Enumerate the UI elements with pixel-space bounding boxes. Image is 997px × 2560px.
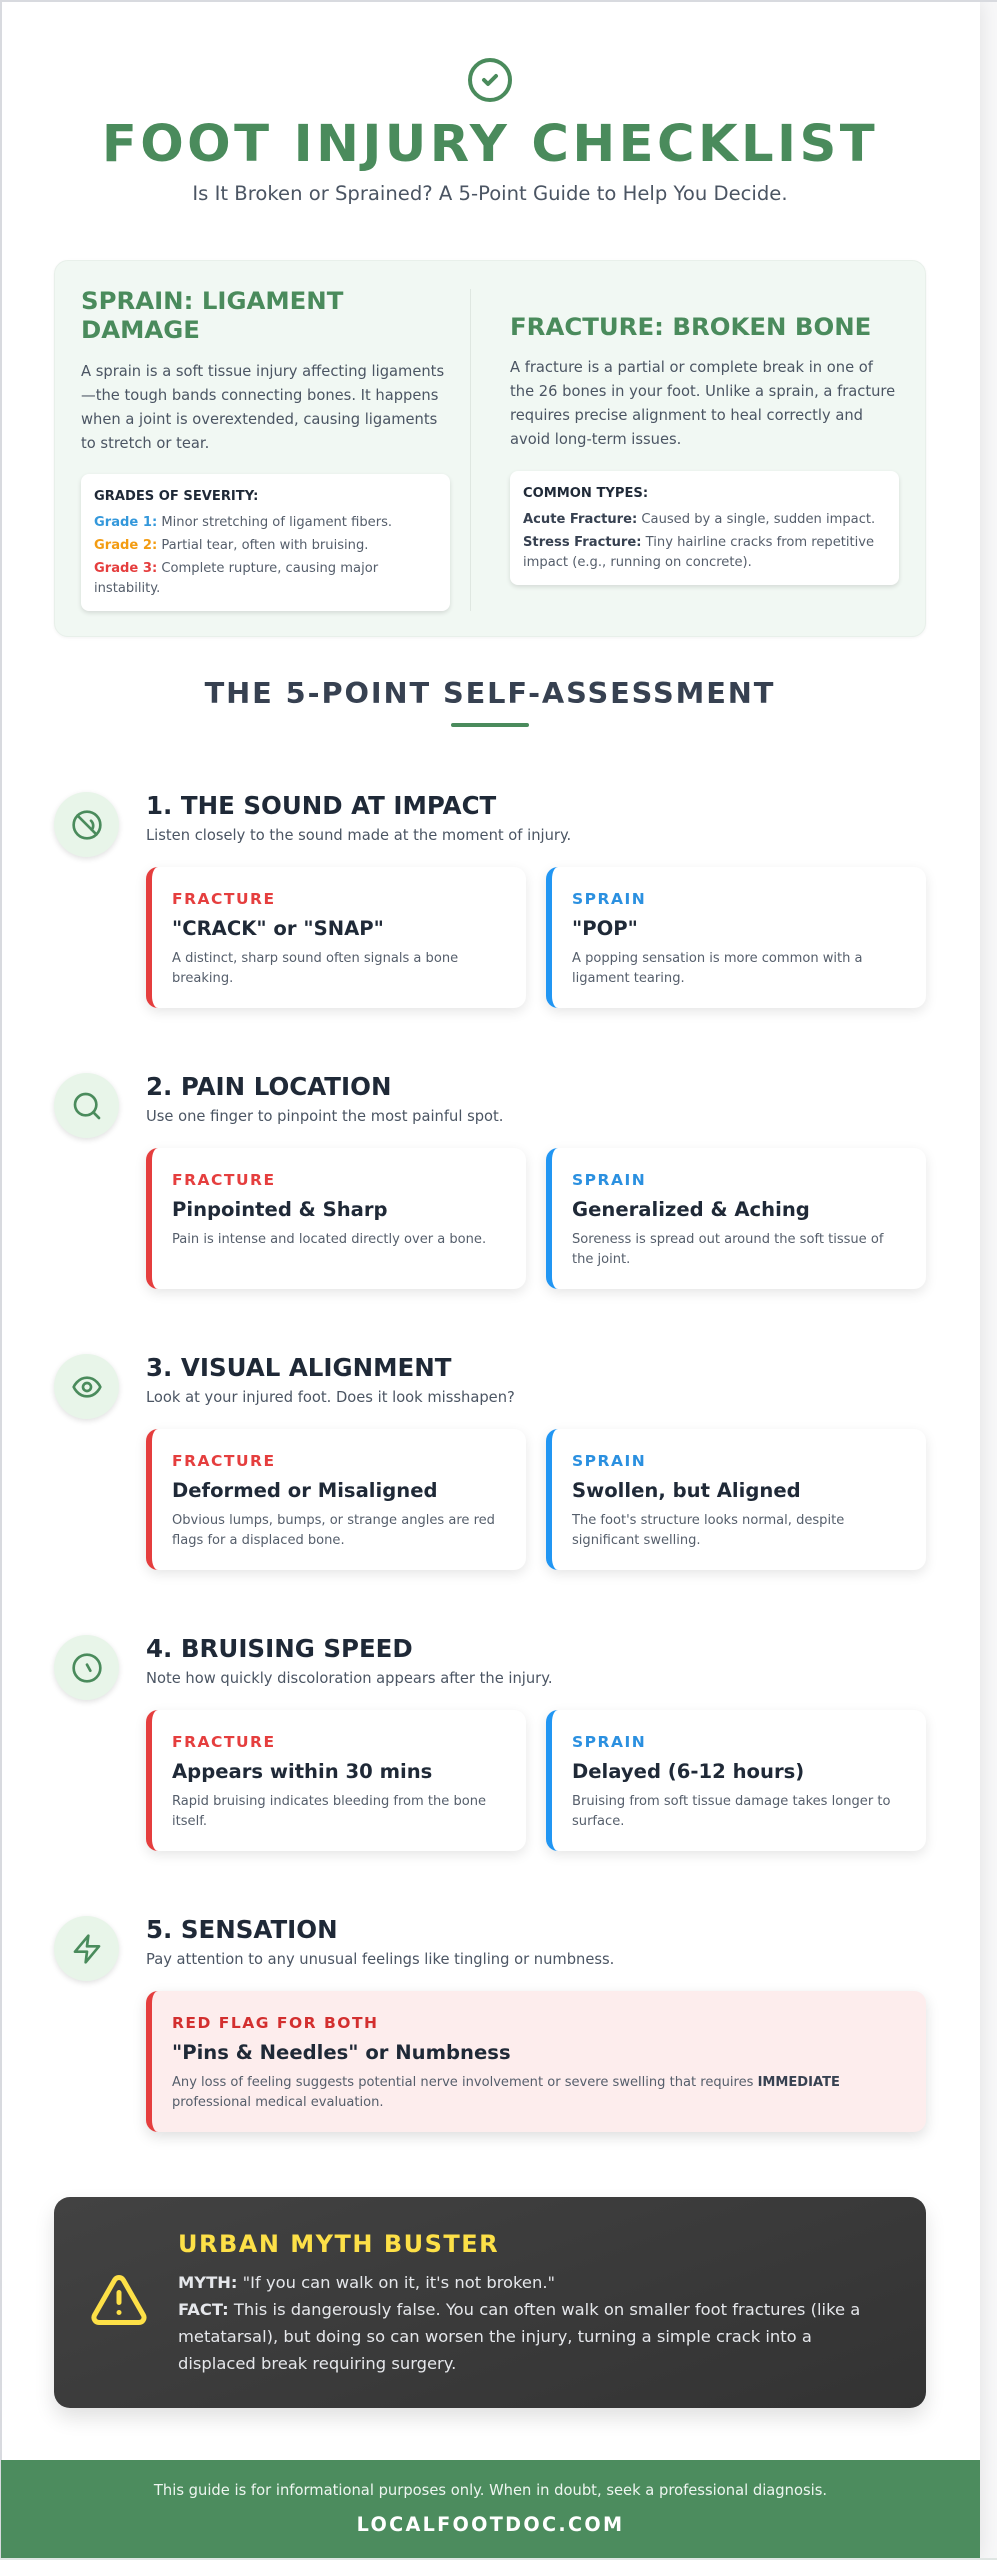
- card: fracture: Deformed or Misaligned: [172, 1479, 438, 1502]
- card: red flag: [146, 1991, 926, 2132]
- card: fracture: [146, 1710, 526, 1851]
- card: sprain: [546, 1429, 926, 1570]
- heading: sprain: [81, 286, 344, 344]
- card: sprain: A popping sensation is more common with a: [572, 951, 863, 966]
- panel: sprain vs fracture definitions: [54, 260, 926, 637]
- panel: urban myth buster: [54, 2197, 926, 2408]
- card: sprain: "POP": [572, 917, 638, 940]
- step title: 2. PAIN LOCATION: [146, 1072, 391, 1101]
- myth text: displaced break requiring surgery.: [178, 2354, 456, 2373]
- card: fracture: FRACTURE: [172, 890, 276, 908]
- card: red flag: "Pins & Needles" or Numbness: [172, 2041, 511, 2064]
- text: fracture description: A fracture is a partial or complete break in one of: [510, 359, 873, 376]
- card: sprain: [546, 1148, 926, 1289]
- heading: self-assessment: THE 5-POINT SELF-ASSESSMENT: [205, 676, 775, 710]
- card: fracture: Pinpointed & Sharp: [172, 1198, 388, 1221]
- step subtitle: Note how quickly discoloration appears after the injury.: [146, 1670, 552, 1687]
- box: common types: [510, 471, 899, 585]
- step subtitle: Look at your injured foot. Does it look misshapen?: [146, 1389, 515, 1406]
- text: fracture description: the 26 bones in your foot. Unlike a sprain, a fracture: [510, 383, 895, 400]
- text: sprain description: [81, 362, 444, 452]
- step 5: [52, 1915, 930, 2142]
- myth heading: URBAN MYTH BUSTER: [178, 2230, 499, 2258]
- text: fracture description: [510, 359, 895, 448]
- box: grades of severity: instability.: [94, 581, 160, 596]
- step title: 3. VISUAL ALIGNMENT: [146, 1353, 451, 1382]
- step 1: [52, 791, 928, 1014]
- heading underline: [451, 723, 529, 727]
- myth text: [178, 2273, 860, 2373]
- heading: grades: GRADES OF SEVERITY:: [94, 489, 258, 504]
- step 2: [52, 1072, 928, 1296]
- card: red flag: Any loss of feeling suggests potential nerve involvement or severe swelling that requires IMMEDIATE: [172, 2075, 840, 2090]
- title: FOOT INJURY CHECKLIST: [102, 114, 878, 174]
- heading: sprain: SPRAIN: LIGAMENT: [81, 286, 343, 315]
- card: sprain: the joint.: [572, 1252, 630, 1267]
- card: fracture: breaking.: [172, 971, 233, 986]
- card: sprain: Soreness is spread out around the soft tissue of: [572, 1232, 883, 1247]
- step subtitle: Use one finger to pinpoint the most painful spot.: [146, 1108, 503, 1125]
- text: sprain description: when a joint is overextended, causing ligaments: [81, 410, 437, 428]
- list: types: Acute Fracture: Caused by a single, sudden impact.: [523, 512, 875, 527]
- card: sprain: The foot's structure looks normal, despite: [572, 1513, 844, 1528]
- card: red flag: RED FLAG FOR BOTH: [172, 2014, 378, 2032]
- card: red flag: professional medical evaluation.: [172, 2095, 384, 2110]
- myth text: FACT: This is dangerously false. You can often walk on smaller foot fractures (like a: [178, 2300, 860, 2319]
- step title: 1. THE SOUND AT IMPACT: [146, 791, 496, 820]
- card: sprain: ligament tearing.: [572, 971, 685, 986]
- icon: warning: [91, 2275, 147, 2325]
- icon: search: [54, 1073, 119, 1138]
- step subtitle: Pay attention to any unusual feelings like tingling or numbness.: [146, 1951, 614, 1968]
- card: fracture: "CRACK" or "SNAP": [172, 917, 384, 940]
- step 4: [52, 1634, 928, 1858]
- card: sprain: SPRAIN: [572, 1733, 646, 1751]
- step subtitle: Listen closely to the sound made at the moment of injury.: [146, 827, 571, 844]
- box: grades of severity: Grade 3: Complete rupture, causing major: [94, 561, 378, 576]
- card: fracture: [146, 1148, 526, 1289]
- heading: types: COMMON TYPES:: [523, 486, 648, 501]
- card: fracture: flags for a displaced bone.: [172, 1533, 345, 1548]
- list: grades: Grade 1: Minor stretching of ligament fibers.: [94, 515, 392, 530]
- box: grades of severity: [81, 474, 450, 611]
- myth text: MYTH: "If you can walk on it, it's not broken.": [178, 2273, 555, 2292]
- step title: 4. BRUISING SPEED: [146, 1634, 413, 1663]
- icon: header check circle: [468, 58, 512, 102]
- card: sprain: [546, 1710, 926, 1851]
- heading: sprain: DAMAGE: [81, 315, 200, 344]
- text: sprain description: A sprain is a soft tissue injury affecting ligaments: [81, 362, 444, 380]
- box: grades of severity: Grade 2: Partial tear, often with bruising.: [94, 538, 368, 553]
- card: fracture: Pain is intense and located directly over a bone.: [172, 1232, 486, 1247]
- card: fracture: itself.: [172, 1814, 207, 1829]
- box: common types: Stress Fracture: Tiny hairline cracks from repetitive: [523, 535, 874, 550]
- heading: fracture: FRACTURE: BROKEN BONE: [510, 312, 871, 341]
- icon: bolt: [54, 1916, 119, 1981]
- text: fracture description: requires precise alignment to heal correctly and: [510, 407, 863, 424]
- myth text: metatarsal), but doing so can worsen the injury, turning a simple crack into a: [178, 2327, 812, 2346]
- text: fracture description: avoid long-term issues.: [510, 431, 681, 448]
- card: sprain: Swollen, but Aligned: [572, 1479, 801, 1502]
- step 3: [52, 1353, 928, 1576]
- text: sprain description: to stretch or tear.: [81, 434, 209, 452]
- icon: eye: [54, 1354, 119, 1419]
- card: sprain: significant swelling.: [572, 1533, 701, 1548]
- card: sprain: [546, 867, 926, 1008]
- card: fracture: [146, 867, 526, 1008]
- text: sprain description: —the tough bands connecting bones. It happens: [81, 386, 438, 404]
- card: fracture: FRACTURE: [172, 1733, 276, 1751]
- box: common types: impact (e.g., running on concrete).: [523, 555, 752, 570]
- card: fracture: FRACTURE: [172, 1452, 276, 1470]
- card: sprain: SPRAIN: [572, 890, 646, 908]
- card: fracture: A distinct, sharp sound often signals a bone: [172, 951, 458, 966]
- card: sprain: surface.: [572, 1814, 624, 1829]
- icon: no sound: [54, 792, 119, 857]
- card: fracture: FRACTURE: [172, 1171, 276, 1189]
- card: fracture: Appears within 30 mins: [172, 1760, 432, 1783]
- card: sprain: Delayed (6-12 hours): [572, 1760, 804, 1783]
- card: sprain: SPRAIN: [572, 1452, 646, 1470]
- card: fracture: Rapid bruising indicates bleeding from the bone: [172, 1794, 486, 1809]
- card: sprain: SPRAIN: [572, 1171, 646, 1189]
- card: fracture: Obvious lumps, bumps, or strange angles are red: [172, 1513, 495, 1528]
- footer website: LOCALFOOTDOC.COM: [357, 2513, 624, 2536]
- subtitle: Is It Broken or Sprained? A 5-Point Guide to Help You Decide.: [192, 182, 788, 205]
- icon: clock: [54, 1635, 119, 1700]
- card: sprain: Generalized & Aching: [572, 1198, 810, 1221]
- footer disclaimer: This guide is for informational purposes only. When in doubt, seek a professional diagnosis.: [154, 2482, 827, 2499]
- card: sprain: Bruising from soft tissue damage takes longer to: [572, 1794, 890, 1809]
- footer: [1, 2460, 980, 2558]
- step title: 5. SENSATION: [146, 1915, 338, 1944]
- card: fracture: [146, 1429, 526, 1570]
